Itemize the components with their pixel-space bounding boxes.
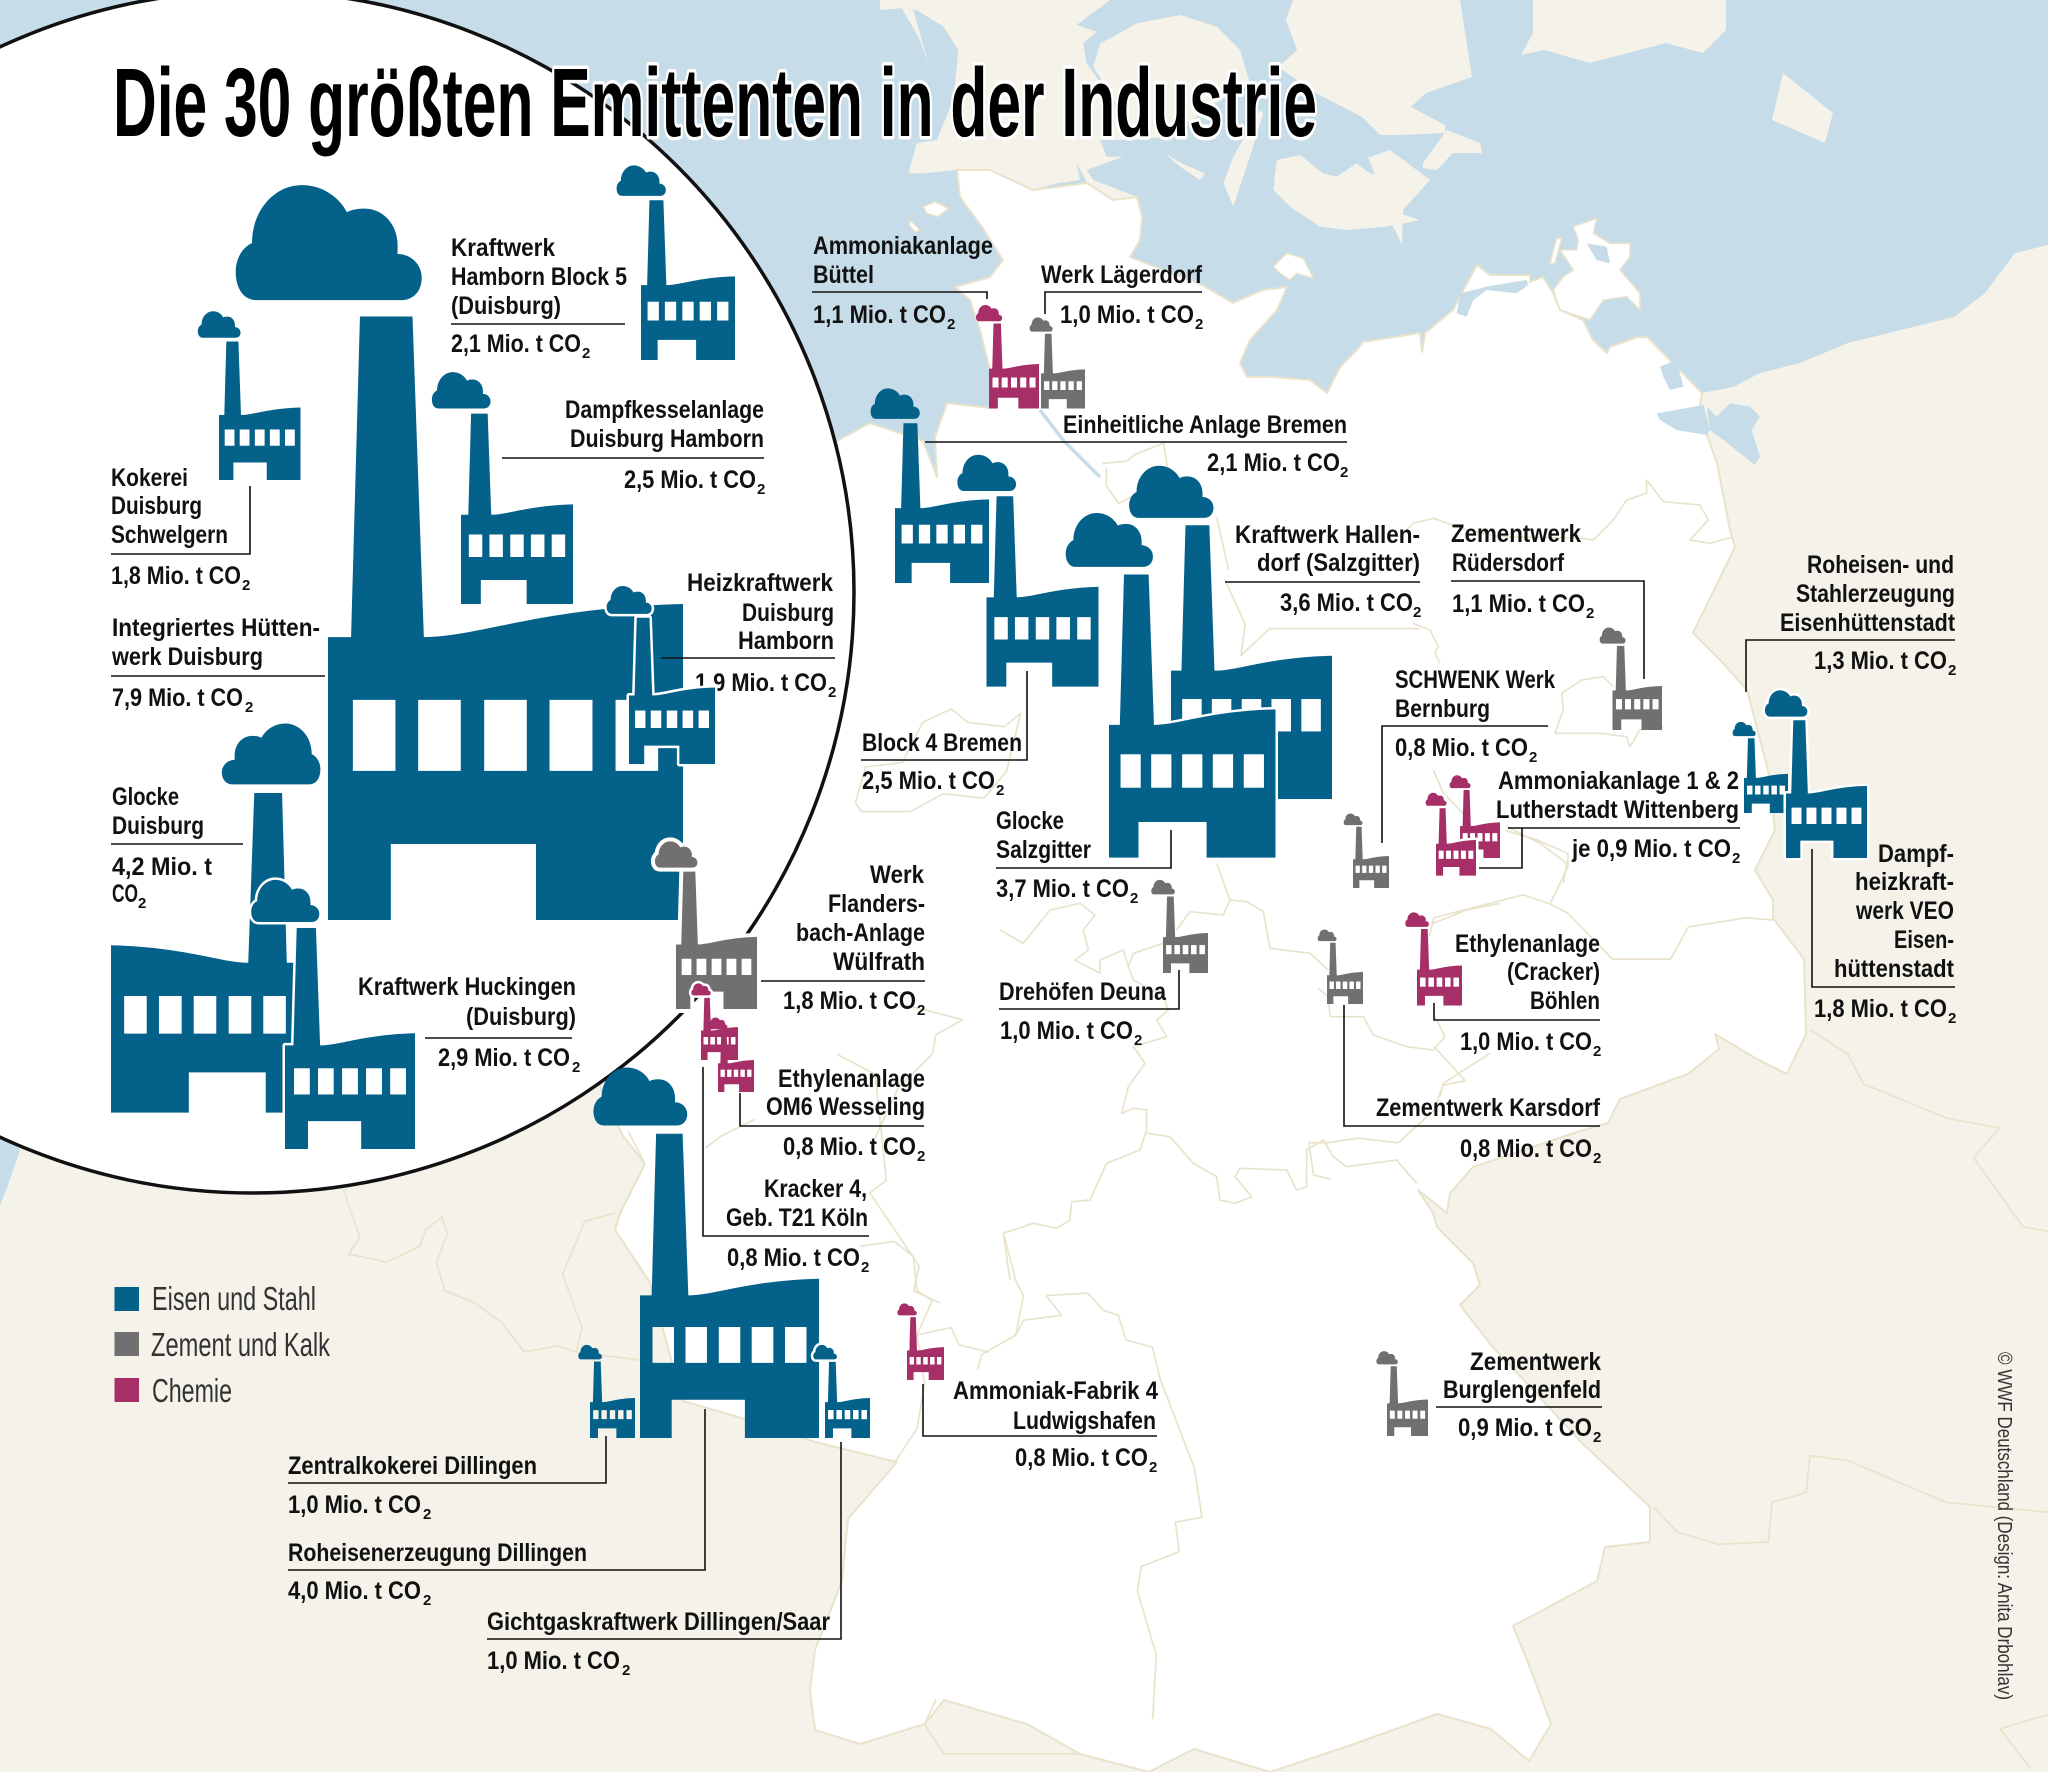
label: Drehöfen Deuna: 1,0 Mio. t CO bbox=[1000, 1017, 1133, 1045]
label: Einheitliche Anlage Bremen: 2,1 Mio. t CO bbox=[1207, 449, 1340, 477]
icon: Gichtgaskraftwerk Dillingen bbox=[813, 1345, 870, 1438]
sea bbox=[0, 0, 2048, 500]
icon: Ammoniakanlage Wittenberg 2 bbox=[1450, 775, 1500, 858]
label: Ammoniak-Fabrik 4 Ludwigshafen: Ammoniak-Fabrik 4 bbox=[953, 1377, 1158, 1405]
label: Block 4 Bremen: 2,5 Mio. t CO bbox=[862, 767, 995, 795]
icon: Roheisenerzeugung Dillingen bbox=[593, 1067, 819, 1438]
label: SCHWENK Werk Bernburg: 0,8 Mio. t CO bbox=[1395, 734, 1528, 762]
label: Einheitliche Anlage Bremen: 2 bbox=[1340, 464, 1348, 481]
label: Kraftwerk Hamborn Block 5: Hamborn Block 5 bbox=[451, 263, 627, 291]
label: Glocke Salzgitter: 3,7 Mio. t CO bbox=[996, 875, 1129, 903]
icon: Kokerei Schwelgern bbox=[198, 311, 300, 480]
icon: Ethylenanlage Wesseling bbox=[709, 1017, 754, 1092]
label: Roheisenerzeugung Dillingen bbox=[288, 1409, 705, 1609]
title: Die 30 größten Emittenten in der Industrie bbox=[113, 48, 1317, 157]
label: Ethylenanlage OM6 Wesseling bbox=[740, 1065, 925, 1165]
icon: SCHWENK Bernburg bbox=[1344, 813, 1389, 888]
label: Kokerei Duisburg Schwelgern: Schwelgern bbox=[111, 521, 228, 549]
icon: Kraftwerk Hamborn Block 5 bbox=[617, 165, 735, 360]
label: Glocke Salzgitter: Glocke bbox=[996, 807, 1064, 835]
label: Werk Lägerdorf: Werk Lägerdorf bbox=[1041, 261, 1203, 289]
label: Werk Flandersbach-Anlage Wülfrath: 2 bbox=[917, 1002, 925, 1019]
label: Werk Flandersbach-Anlage Wülfrath: Flanders- bbox=[828, 890, 925, 918]
label: Ethylenanlage (Cracker) Böhlen bbox=[1434, 930, 1601, 1060]
label: Glocke Duisburg: Glocke bbox=[112, 783, 179, 811]
label: Roheisenerzeugung Dillingen: 2 bbox=[423, 1592, 431, 1609]
label: Kraftwerk Hallendorf: 3,6 Mio. t CO bbox=[1280, 589, 1413, 617]
label: Kraftwerk Hamborn Block 5: (Duisburg) bbox=[451, 292, 561, 320]
neighbouring land and islands bbox=[880, 0, 1420, 230]
label: Dampfheizkraftwerk VEO Eisenhüttenstadt: 2 bbox=[1948, 1010, 1956, 1027]
label: Ammoniak-Fabrik 4 Ludwigshafen bbox=[923, 1377, 1158, 1476]
label: Gichtgaskraftwerk Dillingen/Saar bbox=[487, 1442, 841, 1679]
label: Drehöfen Deuna bbox=[999, 970, 1179, 1049]
icon: Zentralkokerei Dillingen bbox=[578, 1345, 635, 1438]
factory icons bbox=[111, 165, 1867, 1438]
label: Kracker 4 Köln: 0,8 Mio. t CO bbox=[727, 1244, 860, 1272]
sea sliver bottom left bbox=[0, 1130, 20, 1205]
icon: Block 4 Bremen bbox=[957, 455, 1098, 687]
legend bbox=[114, 1280, 330, 1409]
label: Ethylenanlage OM6 Wesseling: Ethylenanlage bbox=[778, 1065, 925, 1093]
icon: Kraftwerk Hallendorf bbox=[1129, 466, 1332, 799]
label: Block 4 Bremen: Block 4 Bremen bbox=[862, 729, 1022, 757]
label: Zentralkokerei Dillingen: 1,0 Mio. t CO bbox=[288, 1491, 421, 1519]
icon: Glocke Duisburg bbox=[111, 723, 320, 1113]
label: Gichtgaskraftwerk Dillingen/Saar: 2 bbox=[622, 1662, 630, 1679]
Rügen, Darss and Stettin lagoon bbox=[1457, 218, 1760, 465]
icon: Ammoniakanlage Wittenberg 1 bbox=[1426, 793, 1476, 876]
label: Heizkraftwerk Duisburg Hamborn: Heizkraftwerk bbox=[687, 569, 833, 597]
label: Kokerei Duisburg Schwelgern: 1,8 Mio. t CO bbox=[111, 562, 241, 590]
label: Roheisen- und Stahlerzeugung Eisenhüttenstadt: Roheisen- und bbox=[1807, 551, 1954, 579]
leader line: Heizkraftwerk bbox=[661, 657, 835, 659]
label: SCHWENK Werk Bernburg: 2 bbox=[1529, 749, 1537, 766]
label: Zementwerk Karsdorf: 0,8 Mio. t CO bbox=[1460, 1135, 1592, 1163]
label: Kraftwerk Hamborn Block 5: Kraftwerk bbox=[451, 234, 555, 262]
label: Roheisenerzeugung Dillingen: Roheisenerzeugung Dillingen bbox=[288, 1539, 587, 1567]
label: Ammoniak-Fabrik 4 Ludwigshafen: 0,8 Mio. t CO bbox=[1015, 1444, 1148, 1472]
label: Kracker 4 Köln bbox=[703, 1067, 869, 1276]
label: Integriertes Hüttenwerk Duisburg: Integriertes Hütten- bbox=[112, 614, 320, 642]
label: Ammoniak-Fabrik 4 Ludwigshafen: Ludwigshafen bbox=[1013, 1407, 1156, 1435]
label: Dampfkesselanlage Duisburg Hamborn: Dampfkesselanlage bbox=[565, 396, 764, 424]
label: Heizkraftwerk Duisburg Hamborn: Hamborn bbox=[738, 627, 834, 655]
label: Dampfheizkraftwerk VEO Eisenhüttenstadt: hüttenstadt bbox=[1834, 955, 1955, 983]
label: Dampfkesselanlage Duisburg Hamborn: 2,5 Mio. t CO bbox=[624, 466, 756, 494]
label: Kraftwerk Hallendorf: 2 bbox=[1413, 604, 1421, 621]
label: Kraftwerk Huckingen bbox=[358, 973, 580, 1076]
label: Ethylenanlage OM6 Wesseling: 2 bbox=[917, 1148, 925, 1165]
label: Ammoniakanlage 1 & 2 Lutherstadt Wittenberg: je 0,9 Mio. t CO bbox=[1571, 835, 1731, 863]
label: Einheitliche Anlage Bremen bbox=[925, 411, 1348, 481]
label: Dampfkesselanlage Duisburg Hamborn: 2 bbox=[757, 481, 765, 498]
label: Integriertes Hüttenwerk Duisburg bbox=[111, 614, 325, 716]
icon: Heizkraftwerk Hamborn bbox=[607, 586, 715, 764]
legend: Zement und Kalk bbox=[114, 1326, 330, 1363]
icon: Ethylenanlage Böhlen bbox=[1405, 912, 1462, 1006]
label: Dampfheizkraftwerk VEO Eisenhüttenstadt: 1,8 Mio. t CO bbox=[1814, 995, 1947, 1023]
label: Dampfkesselanlage Duisburg Hamborn bbox=[502, 396, 765, 498]
label: Kracker 4 Köln: 2 bbox=[861, 1259, 869, 1276]
label: Zementwerk Rüdersdorf: Rüdersdorf bbox=[1452, 549, 1565, 577]
label: Ammoniakanlage Büttel: 2 bbox=[947, 316, 955, 333]
label: Ethylenanlage (Cracker) Böhlen: Böhlen bbox=[1530, 987, 1600, 1015]
label: Werk Lägerdorf: 1,0 Mio. t CO bbox=[1060, 301, 1194, 329]
label: Ammoniakanlage Büttel: Büttel bbox=[813, 261, 874, 289]
label: Roheisen- und Stahlerzeugung Eisenhüttenstadt: Eisenhüttenstadt bbox=[1780, 609, 1956, 637]
label: Zementwerk Karsdorf: Zementwerk Karsdorf bbox=[1376, 1094, 1601, 1122]
legend: Zement und Kalk: Zement und Kalk bbox=[151, 1326, 330, 1363]
icon: Dampfheizkraftwerk VEO bbox=[1765, 690, 1867, 858]
label: Heizkraftwerk Duisburg Hamborn bbox=[687, 569, 836, 701]
icon: Kracker 4 Köln bbox=[691, 983, 738, 1060]
icon: Flandersbach bbox=[655, 841, 757, 1009]
icon: Zementwerk Karsdorf bbox=[1318, 929, 1363, 1004]
label: Zementwerk Burglengenfeld: Burglengenfeld bbox=[1443, 1376, 1601, 1404]
label: Werk Flandersbach-Anlage Wülfrath: 1,8 Mio. t CO bbox=[783, 987, 916, 1015]
label: Werk Flandersbach-Anlage Wülfrath bbox=[761, 861, 925, 1019]
label: Glocke Duisburg: 2 bbox=[138, 895, 146, 912]
label: SCHWENK Werk Bernburg: Bernburg bbox=[1395, 695, 1490, 723]
label: Ethylenanlage (Cracker) Böhlen: 2 bbox=[1593, 1043, 1601, 1060]
legend: Eisen und Stahl: Eisen und Stahl bbox=[152, 1280, 316, 1317]
legend: Chemie bbox=[114, 1372, 232, 1409]
label: Roheisen- und Stahlerzeugung Eisenhüttenstadt: 1,3 Mio. t CO bbox=[1814, 647, 1947, 675]
label: Gichtgaskraftwerk Dillingen/Saar: Gichtgaskraftwerk Dillingen/Saar bbox=[487, 1608, 830, 1636]
icon: Zementwerk Rüdersdorf bbox=[1600, 628, 1662, 730]
label: Heizkraftwerk Duisburg Hamborn: 2 bbox=[828, 684, 836, 701]
legend: Eisen und Stahl bbox=[114, 1280, 316, 1317]
label: Kokerei Duisburg Schwelgern bbox=[111, 464, 250, 594]
magnifier circle bbox=[0, 0, 854, 1193]
label: Zementwerk Rüdersdorf bbox=[1451, 520, 1644, 679]
label: Block 4 Bremen bbox=[861, 671, 1027, 799]
label: Kokerei Duisburg Schwelgern: Kokerei bbox=[111, 464, 188, 492]
icon: Dampfkesselanlage Hamborn bbox=[432, 372, 573, 604]
label: Ammoniakanlage 1 & 2 Lutherstadt Wittenberg: Lutherstadt Wittenberg bbox=[1496, 796, 1739, 824]
icon: Einheitliche Anlage Bremen bbox=[871, 388, 989, 583]
label: Drehöfen Deuna: Drehöfen Deuna bbox=[999, 978, 1167, 1006]
label: Kracker 4 Köln: Geb. T21 Köln bbox=[726, 1204, 868, 1232]
icon: Glocke Salzgitter bbox=[1066, 513, 1276, 858]
icon: Ammoniakanlage Büttel bbox=[976, 305, 1039, 408]
icon: Drehöfen Deuna bbox=[1151, 880, 1208, 973]
label: Kokerei Duisburg Schwelgern: 2 bbox=[242, 577, 250, 594]
label: Dampfheizkraftwerk VEO Eisenhüttenstadt: Dampf- bbox=[1878, 840, 1954, 868]
label: Block 4 Bremen: 2 bbox=[996, 782, 1004, 799]
label: Kraftwerk Hallendorf bbox=[1225, 521, 1421, 621]
label: Glocke Duisburg bbox=[111, 783, 243, 912]
label: Ammoniakanlage 1 & 2 Lutherstadt Wittenberg: 2 bbox=[1732, 850, 1740, 867]
label: Kracker 4 Köln: Kracker 4, bbox=[764, 1175, 867, 1203]
label: Integriertes Hüttenwerk Duisburg: werk Duisburg bbox=[111, 643, 263, 671]
label: Kraftwerk Hamborn Block 5: 2,1 Mio. t CO bbox=[451, 330, 581, 358]
label: Ammoniakanlage Büttel: 1,1 Mio. t CO bbox=[813, 301, 946, 329]
label: Ammoniakanlage Büttel bbox=[812, 232, 993, 333]
label: Ethylenanlage (Cracker) Böhlen: (Cracker) bbox=[1507, 958, 1600, 986]
label: Heizkraftwerk Duisburg Hamborn: Duisburg bbox=[742, 599, 834, 627]
label: Werk Flandersbach-Anlage Wülfrath: bach-Anlage bbox=[796, 919, 925, 947]
label: Werk Lägerdorf bbox=[1041, 261, 1203, 333]
label: Ethylenanlage OM6 Wesseling: 0,8 Mio. t CO bbox=[783, 1133, 916, 1161]
label: Roheisen- und Stahlerzeugung Eisenhüttenstadt bbox=[1746, 551, 1956, 692]
icon: Werk Lägerdorf bbox=[1030, 317, 1085, 408]
label: Ethylenanlage (Cracker) Böhlen: Ethylenanlage bbox=[1455, 930, 1600, 958]
label: Ethylenanlage OM6 Wesseling: OM6 Wesseling bbox=[766, 1093, 925, 1121]
river Elbe bbox=[1040, 410, 1100, 477]
legend: Chemie: Chemie bbox=[152, 1372, 232, 1409]
label: Zementwerk Karsdorf: 2 bbox=[1593, 1150, 1601, 1167]
label: Dampfheizkraftwerk VEO Eisenhüttenstadt bbox=[1812, 840, 1956, 1027]
label: Werk Lägerdorf: 2 bbox=[1195, 316, 1203, 333]
credit: © WWF Deutschland (Design: Anita Drbohlav) bbox=[1993, 1352, 2015, 1700]
icon: Integriertes Hüttenwerk Duisburg bbox=[236, 185, 683, 920]
label: Kraftwerk Hallendorf: dorf (Salzgitter) bbox=[1257, 549, 1420, 577]
labels bbox=[111, 232, 1956, 1679]
label: SCHWENK Werk Bernburg: SCHWENK Werk bbox=[1395, 666, 1555, 694]
label: Kraftwerk Huckingen: 2,9 Mio. t CO bbox=[438, 1044, 570, 1072]
Germany bbox=[600, 170, 1806, 1772]
label: Ammoniak-Fabrik 4 Ludwigshafen: 2 bbox=[1149, 1459, 1157, 1476]
label: Kraftwerk Hamborn Block 5 bbox=[451, 234, 627, 362]
label: Glocke Salzgitter: 2 bbox=[1130, 890, 1138, 907]
label: Ammoniakanlage 1 & 2 Lutherstadt Wittenberg bbox=[1479, 767, 1740, 868]
label: Glocke Duisburg: Duisburg bbox=[112, 812, 204, 840]
state and country borders bbox=[855, 443, 1420, 812]
label: Zementwerk Burglengenfeld bbox=[1436, 1348, 1602, 1446]
label: Zementwerk Rüdersdorf: Zementwerk bbox=[1451, 520, 1581, 548]
label: Roheisen- und Stahlerzeugung Eisenhüttenstadt: 2 bbox=[1948, 662, 1956, 679]
label: Werk Flandersbach-Anlage Wülfrath: Werk bbox=[870, 861, 924, 889]
label: Glocke Duisburg: CO bbox=[112, 880, 138, 908]
label: Dampfheizkraftwerk VEO Eisenhüttenstadt: werk VEO bbox=[1855, 897, 1954, 925]
label: Glocke Salzgitter: Salzgitter bbox=[996, 836, 1091, 864]
label: Zentralkokerei Dillingen: 2 bbox=[423, 1506, 431, 1523]
label: Zementwerk Burglengenfeld: 2 bbox=[1593, 1429, 1601, 1446]
label: Zementwerk Burglengenfeld: 0,9 Mio. t CO bbox=[1458, 1414, 1592, 1442]
label: Zentralkokerei Dillingen: Zentralkokerei Dillingen bbox=[288, 1452, 537, 1480]
label: Dampfheizkraftwerk VEO Eisenhüttenstadt: Eisen- bbox=[1894, 926, 1954, 954]
label: Ethylenanlage (Cracker) Böhlen: 1,0 Mio. t CO bbox=[1460, 1028, 1592, 1056]
label: Roheisenerzeugung Dillingen: 4,0 Mio. t CO bbox=[288, 1577, 421, 1605]
icon: Kraftwerk Huckingen bbox=[251, 880, 415, 1149]
label: Integriertes Hüttenwerk Duisburg: 7,9 Mio. t CO bbox=[112, 684, 243, 712]
label: Kraftwerk Huckingen: 2 bbox=[572, 1059, 580, 1076]
label: Ammoniakanlage 1 & 2 Lutherstadt Wittenberg: Ammoniakanlage 1 & 2 bbox=[1498, 767, 1739, 795]
label: Dampfkesselanlage Duisburg Hamborn: Duisburg Hamborn bbox=[570, 425, 764, 453]
label: Kraftwerk Huckingen: Kraftwerk Huckingen bbox=[358, 973, 576, 1001]
icon: Zementwerk Burglengenfeld bbox=[1376, 1351, 1428, 1436]
label: Roheisen- und Stahlerzeugung Eisenhüttenstadt: Stahlerzeugung bbox=[1796, 580, 1955, 608]
icon: Roheisen Eisenhüttenstadt bbox=[1733, 722, 1788, 813]
North Sea and Baltic islands bbox=[909, 202, 1313, 280]
label: Heizkraftwerk Duisburg Hamborn: 1,9 Mio. t CO bbox=[695, 669, 827, 697]
label: Kraftwerk Hamborn Block 5: 2 bbox=[582, 345, 590, 362]
label: Drehöfen Deuna: 2 bbox=[1134, 1032, 1142, 1049]
label: Zementwerk Karsdorf bbox=[1344, 1005, 1601, 1167]
label: Glocke Duisburg: 4,2 Mio. t bbox=[112, 853, 213, 881]
label: Zementwerk Burglengenfeld: Zementwerk bbox=[1470, 1348, 1601, 1376]
label: Zentralkokerei Dillingen bbox=[288, 1436, 606, 1523]
label: Kraftwerk Huckingen: (Duisburg) bbox=[466, 1003, 576, 1031]
label: Ammoniakanlage Büttel: Ammoniakanlage bbox=[813, 232, 993, 260]
icon: Ammoniak-Fabrik Ludwigshafen bbox=[897, 1303, 944, 1380]
label: Integriertes Hüttenwerk Duisburg: 2 bbox=[245, 699, 253, 716]
label: SCHWENK Werk Bernburg bbox=[1382, 666, 1555, 843]
label: Gichtgaskraftwerk Dillingen/Saar: 1,0 Mio. t CO bbox=[487, 1647, 620, 1675]
label: Zementwerk Rüdersdorf: 2 bbox=[1586, 605, 1594, 622]
label: Kraftwerk Hallendorf: Kraftwerk Hallen- bbox=[1235, 521, 1420, 549]
label: Glocke Salzgitter bbox=[996, 807, 1171, 907]
label: Werk Flandersbach-Anlage Wülfrath: Wülfrath bbox=[833, 948, 925, 976]
label: Zementwerk Rüdersdorf: 1,1 Mio. t CO bbox=[1452, 590, 1585, 618]
label: Dampfheizkraftwerk VEO Eisenhüttenstadt: heizkraft- bbox=[1855, 868, 1954, 896]
label: Einheitliche Anlage Bremen: Einheitliche Anlage Bremen bbox=[1063, 411, 1347, 439]
label: Kokerei Duisburg Schwelgern: Duisburg bbox=[111, 492, 202, 520]
